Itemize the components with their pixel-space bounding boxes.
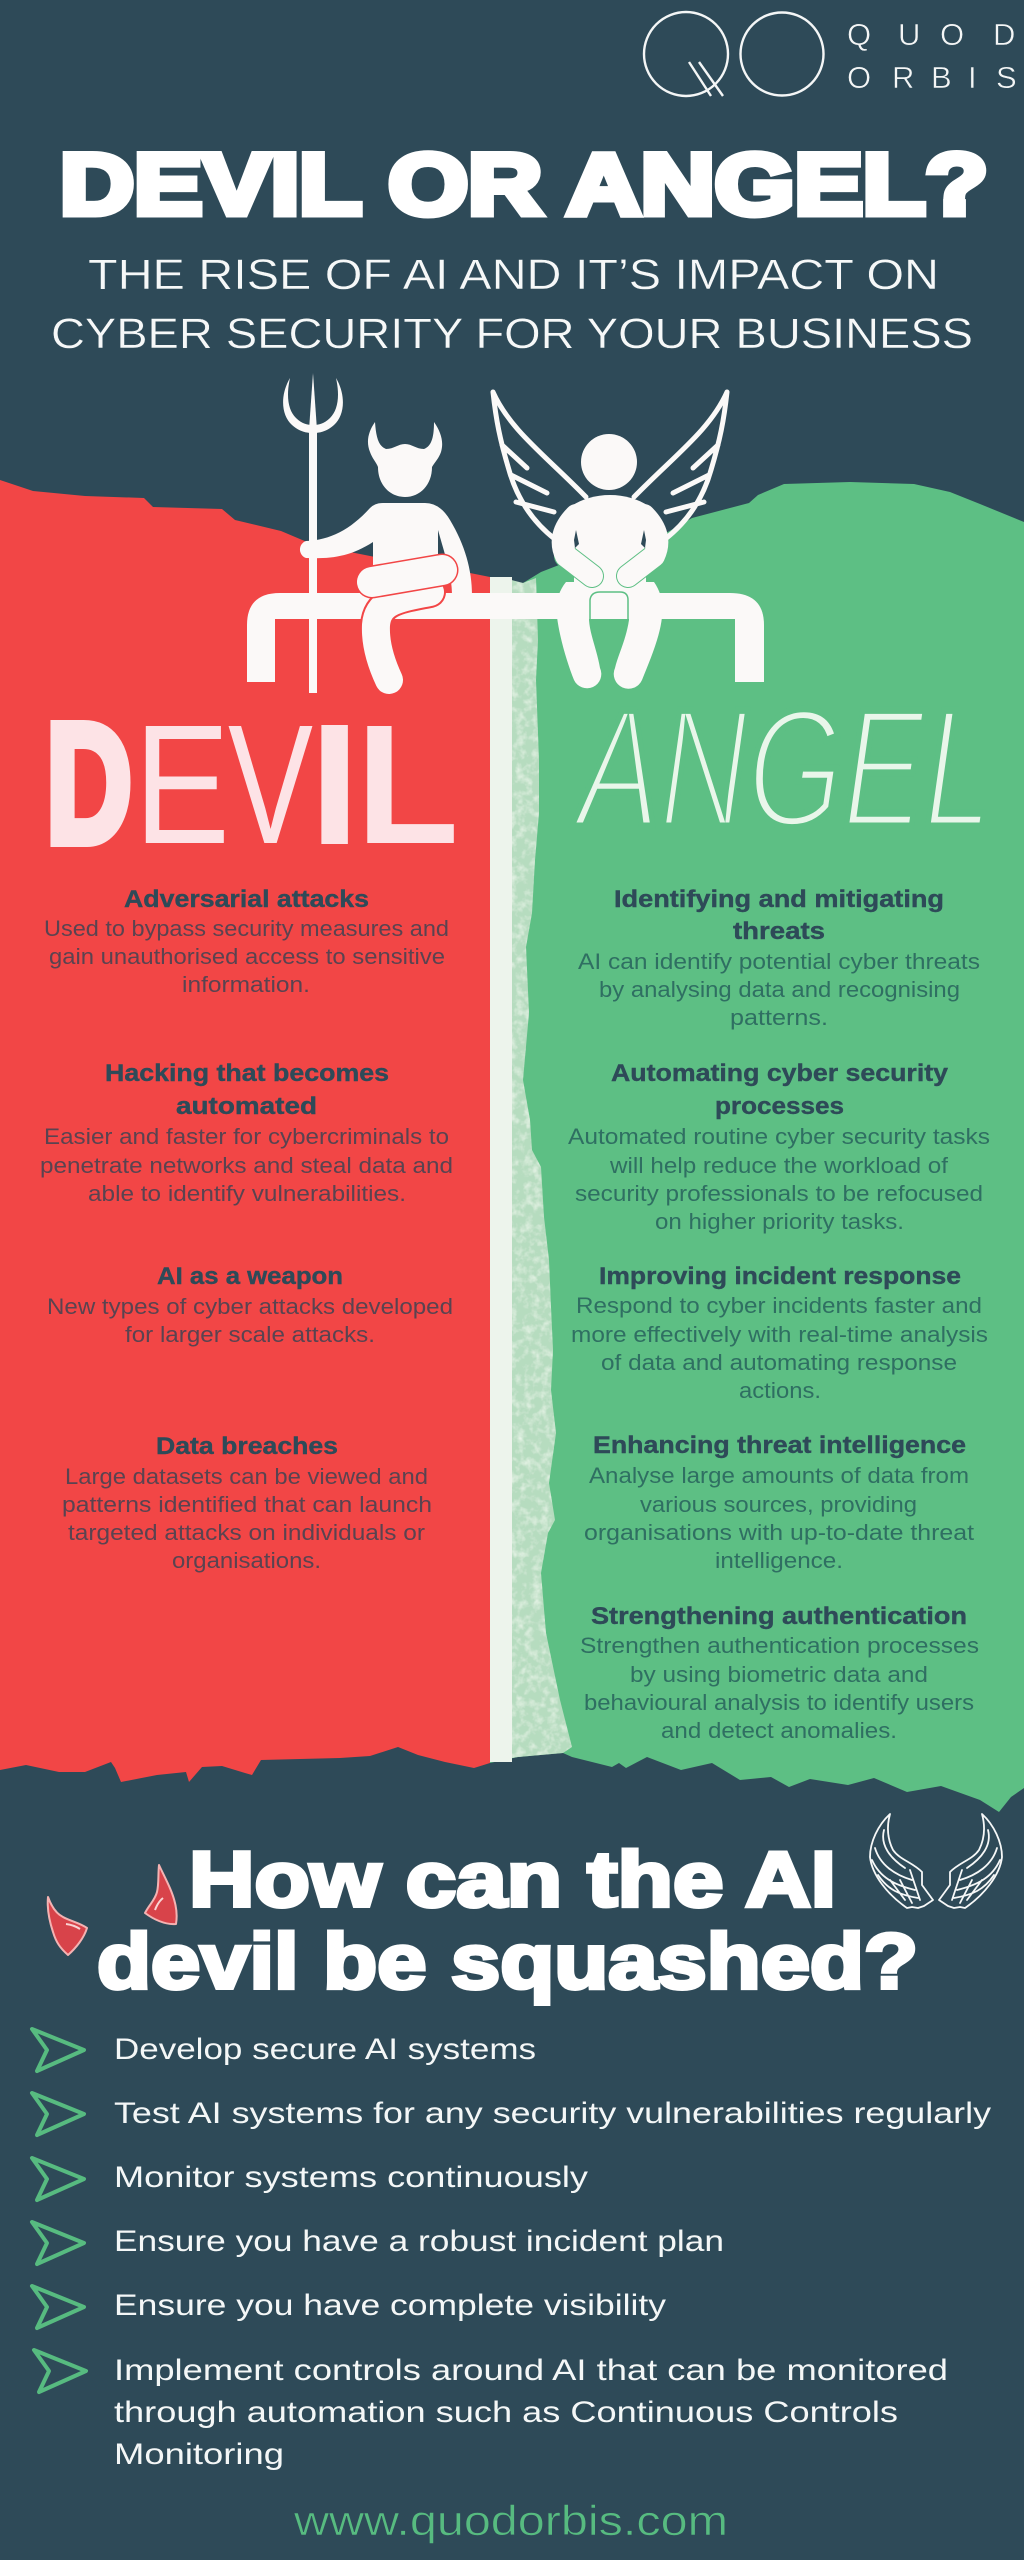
item: AI as a weapon: for larger scale attacks. <box>125 1322 375 1347</box>
item: authentication: Strengthen authentication processes <box>580 1633 979 1658</box>
item: incident response <box>571 1263 988 1403</box>
item: authentication <box>580 1603 979 1743</box>
logo: Quod Orbis <box>644 12 1017 96</box>
heading: how can the AI devil be squashed: How can the AI <box>189 1835 836 1923</box>
list item 6: through automation such as Continuous Controls <box>114 2396 898 2429</box>
item: AI as a weapon <box>47 1263 453 1347</box>
item: hacking: penetrate networks and steal data and <box>40 1153 453 1178</box>
bench <box>247 593 764 682</box>
panel: torn paper divider <box>490 577 572 1762</box>
item: adversarial attacks: information. <box>182 972 310 997</box>
list item 2: Test AI systems for any security vulnerabilities regularly <box>114 2097 991 2130</box>
logo wordmark: ORBIS <box>847 60 1017 95</box>
list item 1: Develop secure AI systems <box>114 2033 536 2066</box>
icon: arrow <box>32 2093 84 2135</box>
devil head with horns <box>368 422 442 497</box>
subtitle: CYBER SECURITY FOR YOUR BUSINESS <box>51 310 973 358</box>
item: data breaches: Data breaches <box>156 1433 338 1460</box>
item: automating: on higher priority tasks. <box>655 1209 904 1234</box>
item: identifying: by analysing data and recognising <box>599 977 960 1002</box>
panel: angel text column <box>568 886 990 1743</box>
item: authentication: by using biometric data and <box>630 1662 928 1687</box>
item: data breaches: targeted attacks on individuals or <box>68 1520 425 1545</box>
heading: DEVIL: V <box>228 690 313 880</box>
item: hacking: able to identify vulnerabilities. <box>88 1181 406 1206</box>
item: identifying: AI can identify potential cyber threats <box>578 949 980 974</box>
item: AI as a weapon: AI as a weapon <box>157 1263 343 1290</box>
icon: trident <box>283 373 343 693</box>
illustration: devil and angel on bench <box>247 373 764 693</box>
icon: arrow <box>32 2222 84 2264</box>
panel: devil text column <box>40 886 453 1573</box>
angel figure <box>556 434 664 689</box>
list item 1 <box>32 2029 536 2071</box>
heading: DEVIL: D <box>46 689 132 879</box>
item: identifying: threats <box>733 918 825 945</box>
item: adversarial attacks: Adversarial attacks <box>124 886 369 913</box>
list item 5: Ensure you have complete visibility <box>114 2289 666 2322</box>
title: DEVIL OR ANGEL? <box>60 137 988 233</box>
heading: DEVIL: L <box>356 690 459 880</box>
item: automating <box>568 1060 990 1234</box>
icon: arrow <box>34 2350 86 2392</box>
devil figure <box>283 373 472 693</box>
item: threat intelligence: various sources, providing <box>640 1492 917 1517</box>
icon: devil horns <box>48 1865 177 1955</box>
list: how to squash the devil <box>32 2029 991 2471</box>
panel: devil red torn paper <box>0 480 490 1782</box>
icon: QO rings <box>644 12 824 96</box>
item: automating: will help reduce the workload of <box>609 1153 949 1178</box>
icon: arrow <box>32 2029 84 2071</box>
item: incident response: of data and automating response <box>601 1350 957 1375</box>
item: authentication: Strengthening authentication <box>591 1603 967 1630</box>
item: hacking <box>40 1060 453 1206</box>
item: identifying <box>578 886 980 1030</box>
logo wordmark: QUOD <box>847 17 1015 52</box>
logo wordmark <box>847 17 1017 95</box>
item: AI as a weapon: New types of cyber attacks developed <box>47 1294 453 1319</box>
subtitle <box>51 251 973 358</box>
item: threat intelligence: intelligence. <box>715 1548 843 1573</box>
heading: how can the AI devil be squashed <box>97 1835 918 2005</box>
list item 6 <box>34 2350 948 2471</box>
item: automating: Automating cyber security <box>611 1060 949 1087</box>
item: automating: security professionals to be refocused <box>575 1181 983 1206</box>
icon: angel wings <box>493 392 727 540</box>
icon: white wings <box>870 1814 1002 1908</box>
list item 3: Monitor systems continuously <box>114 2161 588 2194</box>
item: authentication: and detect anomalies. <box>661 1718 897 1743</box>
heading: how can the AI devil be squashed: devil be squashed? <box>97 1917 918 2005</box>
item: adversarial attacks: gain unauthorised access to sensitive <box>49 944 445 969</box>
item: adversarial attacks: Used to bypass security measures and <box>44 916 449 941</box>
icon: arrow <box>32 2158 84 2200</box>
list item 4: Ensure you have a robust incident plan <box>114 2225 724 2258</box>
list item 4 <box>32 2222 724 2264</box>
list item 6: Monitoring <box>114 2438 284 2471</box>
item: incident response: actions. <box>739 1378 821 1403</box>
item: threat intelligence: Analyse large amounts of data from <box>589 1463 969 1488</box>
panel: angel green torn paper <box>490 482 1024 1812</box>
item: authentication: behavioural analysis to identify users <box>584 1690 974 1715</box>
list item 5 <box>32 2286 666 2328</box>
item: automating: Automated routine cyber security tasks <box>568 1124 990 1149</box>
item: threat intelligence: organisations with up-to-date threat <box>584 1520 974 1545</box>
item: hacking: automated <box>176 1093 317 1120</box>
heading: DEVIL <box>46 689 459 880</box>
item: threat intelligence: Enhancing threat intelligence <box>593 1432 966 1459</box>
icon: arrow <box>32 2286 84 2328</box>
list item 6: Implement controls around AI that can be monitored <box>114 2354 948 2387</box>
website url: www.quodorbis.com <box>293 2497 728 2544</box>
item: incident response: Improving incident response <box>599 1263 961 1290</box>
item: identifying: Identifying and mitigating <box>614 886 944 913</box>
list item 2 <box>32 2093 991 2135</box>
item: identifying: patterns. <box>730 1005 828 1030</box>
devil crossed leg <box>372 570 442 680</box>
devil torso and arms <box>300 503 472 595</box>
heading: DEVIL: I <box>311 690 358 880</box>
item: data breaches: Large datasets can be viewed and <box>65 1464 428 1489</box>
item: hacking: Hacking that becomes <box>105 1060 389 1087</box>
item: automating: processes <box>715 1093 844 1120</box>
subtitle: THE RISE OF AI AND IT’S IMPACT ON <box>88 251 939 299</box>
item: threat intelligence <box>584 1432 974 1573</box>
item: data breaches: patterns identified that can launch <box>62 1492 432 1517</box>
item: data breaches <box>62 1433 432 1573</box>
item: hacking: Easier and faster for cybercriminals to <box>44 1124 449 1149</box>
list item 3 <box>32 2158 588 2200</box>
item: adversarial attacks <box>44 886 449 997</box>
item: data breaches: organisations. <box>172 1548 321 1573</box>
heading: DEVIL: E <box>134 690 230 880</box>
item: incident response: Respond to cyber incidents faster and <box>576 1293 982 1318</box>
item: incident response: more effectively with real-time analysis <box>571 1322 988 1347</box>
